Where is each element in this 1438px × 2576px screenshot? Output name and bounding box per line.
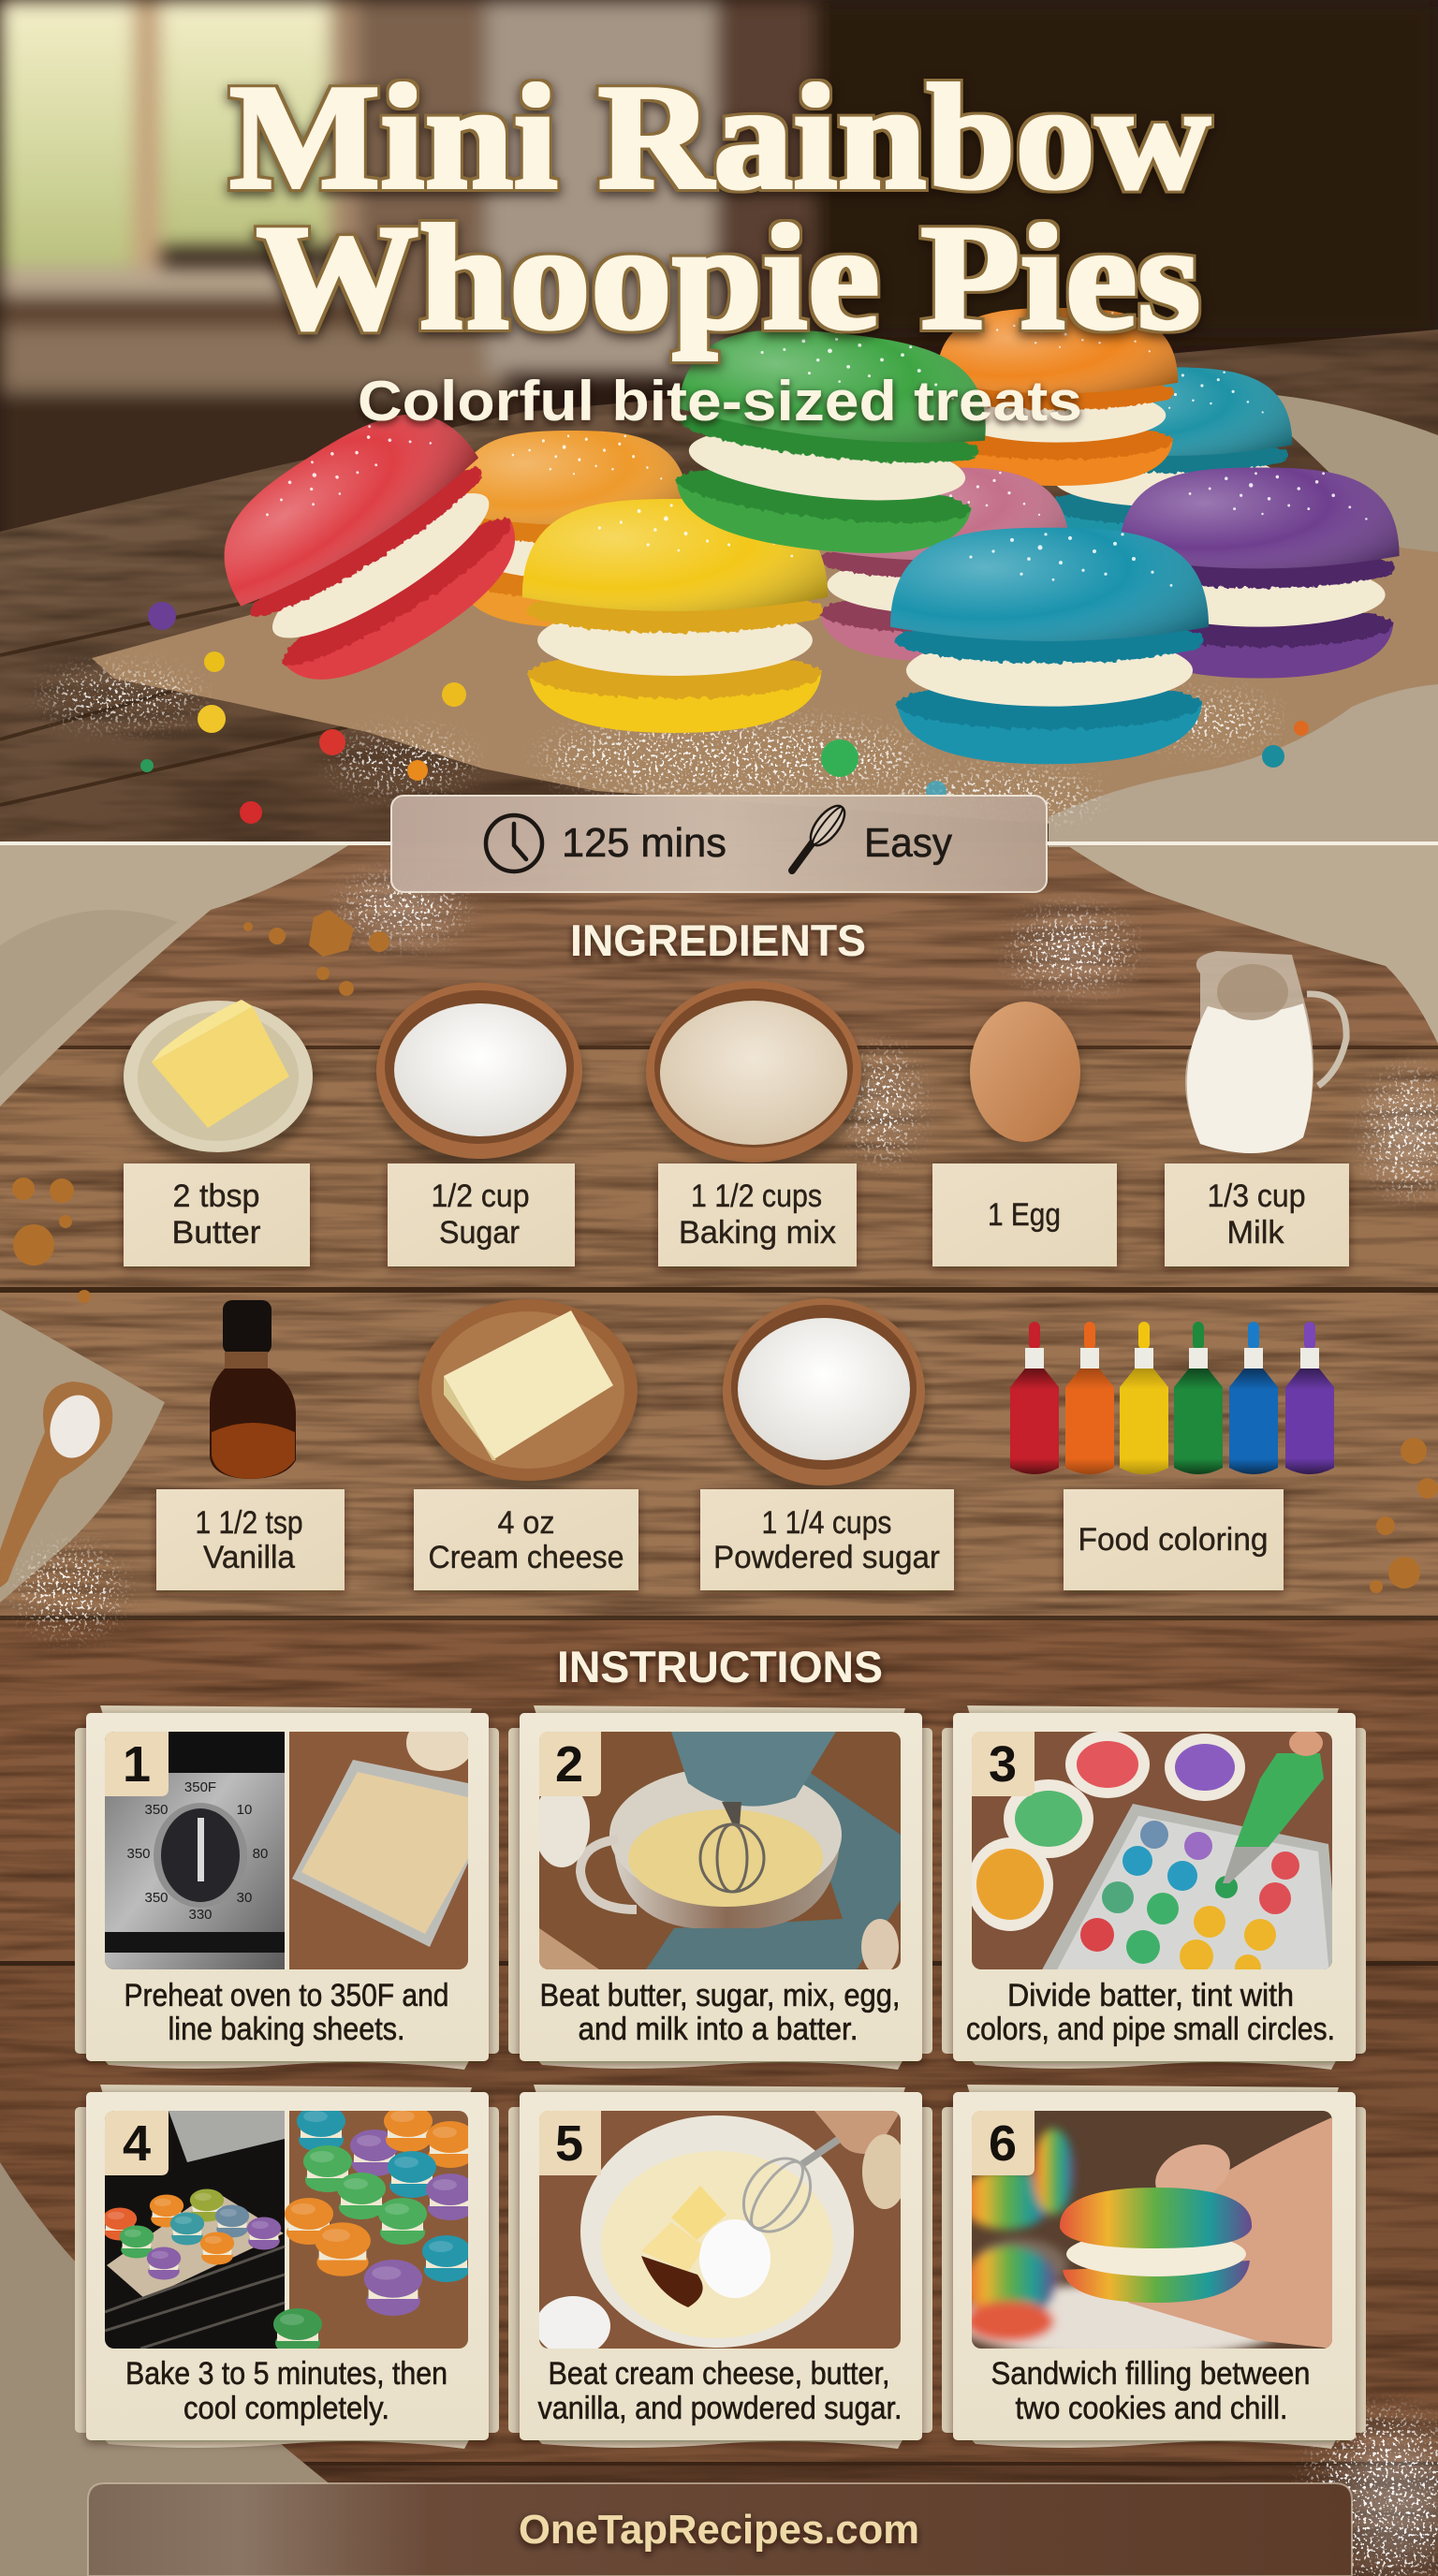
bottle: green [1174,1322,1223,1474]
step 6 caption [990,2356,1311,2426]
step number 1 [105,1732,169,1796]
step 1 photo: oven and baking sheet: 30 [237,1890,252,1906]
ingredient: vanilla [156,1300,345,1590]
step 3 caption: Divide batter, tint with [1007,1978,1294,2013]
step 3 caption [966,1978,1335,2047]
step 2 caption: and milk into a batter. [579,2012,858,2047]
ingredient: food coloring: Food coloring [1078,1522,1268,1558]
hero divider line [0,842,1438,845]
ingredient: milk [1165,951,1349,1266]
linen cloths and spoon [0,842,1438,2576]
heading: ingredients: INGREDIENTS [570,915,866,965]
step number 5: 5 [555,2115,583,2172]
step 1 photo: oven and baking sheet: 350F [184,1779,216,1795]
step number 1: 1 [123,1736,151,1793]
ingredient: vanilla: 1 1/2 tsp [195,1505,303,1541]
ingredient: cream cheese: Cream cheese [429,1540,624,1575]
step 5 card [508,2085,932,2449]
title: Whoopie Pies [257,194,1200,360]
step number 3: 3 [989,1736,1017,1793]
ingredient: egg [932,1002,1117,1266]
step 1 photo: oven and baking sheet: 330 [188,1907,213,1923]
step number 3 [972,1732,1034,1796]
step 5 caption [537,2356,902,2426]
ingredient: cream cheese: 4 oz [498,1505,554,1541]
step 4 card [75,2085,499,2449]
step 1 photo: oven and baking sheet: 350 [144,1890,169,1906]
step 6 caption: two cookies and chill. [1015,2391,1288,2426]
step 2 caption: Beat butter, sugar, mix, egg, [539,1978,901,2013]
step number 5 [539,2111,601,2175]
step 1 caption [124,1978,449,2047]
prep time: 125 mins [562,820,726,866]
step 6 card [942,2085,1366,2449]
icon: whisk [792,800,851,871]
bottle: purple [1285,1322,1334,1474]
ingredient: butter [121,1000,315,1266]
step number 6 [972,2111,1034,2175]
step 1 photo: oven and baking sheet [105,1715,474,1969]
ingredient: food coloring [1010,1322,1334,1590]
ingredient: baking mix: 1 1/2 cups [691,1178,822,1214]
ingredient: powdered sugar: Powdered sugar [713,1540,940,1575]
bottle: orange [1065,1322,1114,1474]
step number 2: 2 [555,1736,583,1793]
ingredient: sugar: 1/2 cup [431,1178,530,1214]
step 1 photo: oven and baking sheet: 350 [144,1802,169,1818]
ingredient: milk: Milk [1226,1215,1285,1251]
bottle: yellow [1120,1322,1168,1474]
heading: instructions: INSTRUCTIONS [557,1642,883,1691]
bottle: red [1010,1322,1059,1474]
step 1 photo: oven and baking sheet: 10 [237,1802,252,1818]
ingredient: baking mix [644,981,863,1266]
step 1 photo: oven and baking sheet: 80 [253,1846,268,1862]
ingredient: baking mix: Baking mix [679,1215,836,1251]
time and difficulty badge [391,796,1047,892]
step 1 caption: Preheat oven to 350F and [124,1978,449,2013]
step 1 caption: line baking sheets. [169,2012,404,2047]
ingredient: cream cheese [414,1299,639,1590]
icon: clock [486,815,542,871]
step 6 caption: Sandwich filling between [990,2356,1311,2392]
step 2 caption [539,1978,901,2047]
step 1 photo: oven and baking sheet: 350 [126,1846,151,1862]
step 6 photo: hand holding rainbow whoopie pie [955,2111,1332,2359]
step 4 caption [125,2356,448,2426]
step 2 card [508,1705,932,2070]
macarons group [193,308,1400,764]
title: Mini Rainbow [229,53,1211,220]
ingredient: powdered sugar [700,1298,954,1590]
step number 6: 6 [989,2115,1017,2172]
hero photo [0,0,1438,847]
step number 2 [539,1732,601,1796]
ingredient: sugar [374,983,584,1266]
ingredient: butter: Butter [172,1215,260,1251]
ingredient: powdered sugar: 1 1/4 cups [762,1505,891,1541]
step 4 photo: oven tray and cooling rack [103,2105,475,2355]
ingredient: egg: 1 Egg [988,1197,1061,1233]
wooden table background [0,842,1438,2576]
step 4 caption: cool completely. [183,2391,389,2426]
bottle: blue [1229,1322,1278,1474]
step 3 caption: colors, and pipe small circles. [966,2012,1335,2047]
step 2 photo: stand mixer with batter [534,1732,901,1975]
difficulty: Easy [864,820,952,866]
step 4 caption: Bake 3 to 5 minutes, then [125,2356,448,2392]
subtitle: Colorful bite-sized treats [358,370,1082,432]
step number 4 [105,2111,169,2175]
hero background room [0,0,1438,842]
step number 4: 4 [123,2115,151,2172]
hero table and parchment [0,318,1438,847]
step 5 photo: cream cheese filling in bowl [536,2111,907,2356]
step 5 caption: Beat cream cheese, butter, [549,2356,889,2392]
step 3 card [942,1705,1366,2070]
ingredient: sugar: Sugar [439,1215,520,1251]
ingredient: milk: 1/3 cup [1208,1178,1305,1214]
step 1 card [75,1705,499,2070]
ingredient: vanilla: Vanilla [203,1540,295,1575]
sprinkles [140,602,1309,824]
ingredient: butter: 2 tbsp [172,1178,260,1214]
website name: OneTapRecipes.com [519,2507,919,2553]
footer bar [88,2483,1352,2576]
step 3 photo: tinted batter and piping [967,1730,1339,1981]
step 5 caption: vanilla, and powdered sugar. [537,2391,902,2426]
flour dustings and crumbs [12,880,1438,2576]
title [229,53,1211,360]
